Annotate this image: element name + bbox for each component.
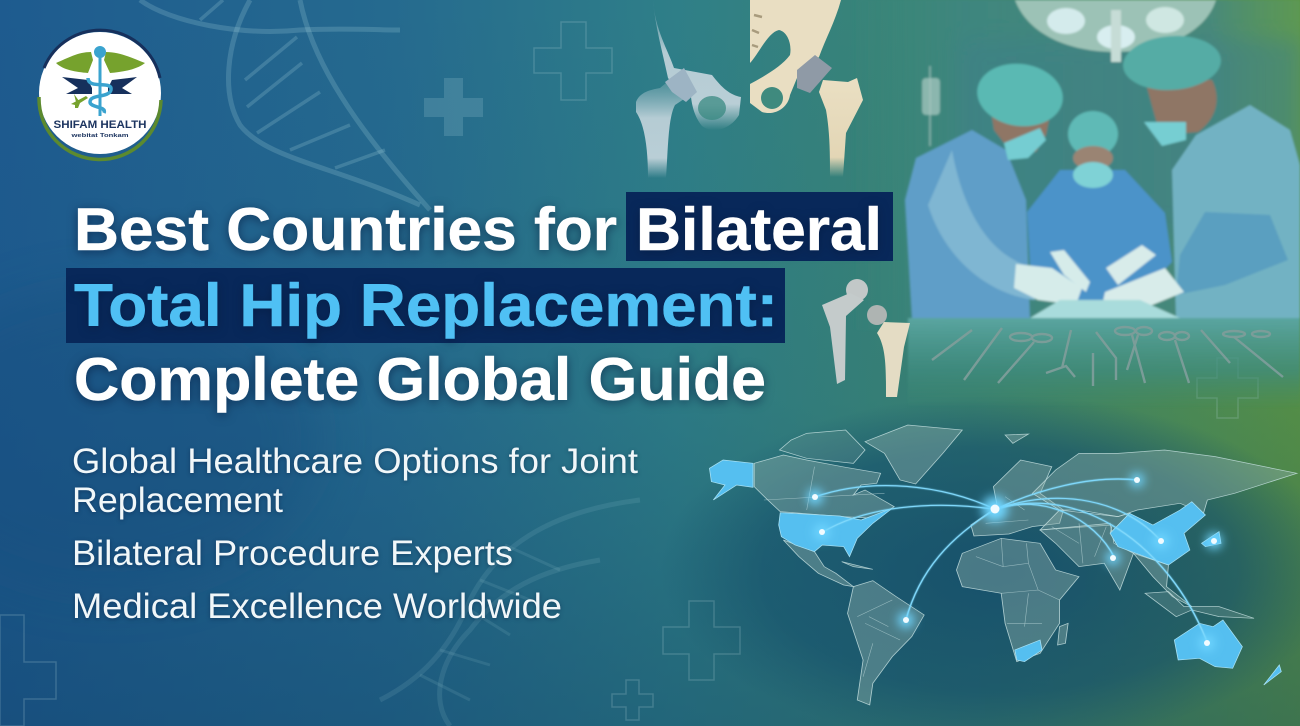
operating room photo — [850, 0, 1300, 408]
logo wings — [56, 52, 145, 73]
map glow points — [807, 473, 1222, 651]
subtitle: global healthcare options: Replacement — [72, 481, 283, 520]
world map — [709, 425, 1297, 705]
subtitle: global healthcare options: Global Healthcare Options for Joint — [72, 442, 638, 481]
illustration: pale hip bone — [636, 0, 741, 178]
left surgeon — [905, 58, 1090, 320]
right surgeon — [1102, 33, 1300, 320]
logo staff and serpent — [88, 48, 111, 116]
surgical instruments — [932, 327, 1283, 386]
subtitle: medical excellence worldwide: Medical Excellence Worldwide — [72, 587, 562, 626]
connection arcs — [814, 479, 1207, 643]
highlighted countries — [709, 460, 1281, 685]
logo tagline: webitat Tonkam — [70, 133, 129, 139]
surgical lamp — [1015, 0, 1216, 62]
logo name: SHIFAM HEALTH — [54, 119, 147, 131]
logo lower wings — [62, 77, 137, 94]
title word: Bilateral: Bilateral — [636, 196, 882, 263]
title highlight: Total Hip Replacement — [66, 268, 785, 343]
patient drape on table — [1030, 300, 1180, 318]
iv bag — [922, 66, 940, 146]
decorative DNA helix top — [140, 0, 430, 210]
title highlight: Bilateral — [626, 192, 893, 261]
subtitle: global healthcare options — [72, 442, 638, 520]
land masses — [754, 425, 1297, 705]
decorative DNA helix bottom — [380, 500, 640, 726]
back wall panel — [960, 40, 1300, 230]
surgical table — [908, 318, 1300, 408]
title line 1: Best Countries for — [74, 196, 617, 263]
logo airplane — [71, 94, 88, 108]
title line 3: Complete Global Guide — [74, 346, 766, 413]
center surgeon — [1027, 111, 1172, 305]
logo badge — [39, 30, 161, 160]
illustration: beige hip bone — [750, 0, 863, 177]
room backdrop — [850, 0, 1300, 330]
title line 2: Total Hip Replacement: — [74, 272, 778, 339]
subtitle: bilateral procedure experts: Bilateral Procedure Experts — [72, 534, 513, 573]
illustration: hip implant stems — [822, 279, 910, 397]
country borders — [764, 467, 1106, 677]
